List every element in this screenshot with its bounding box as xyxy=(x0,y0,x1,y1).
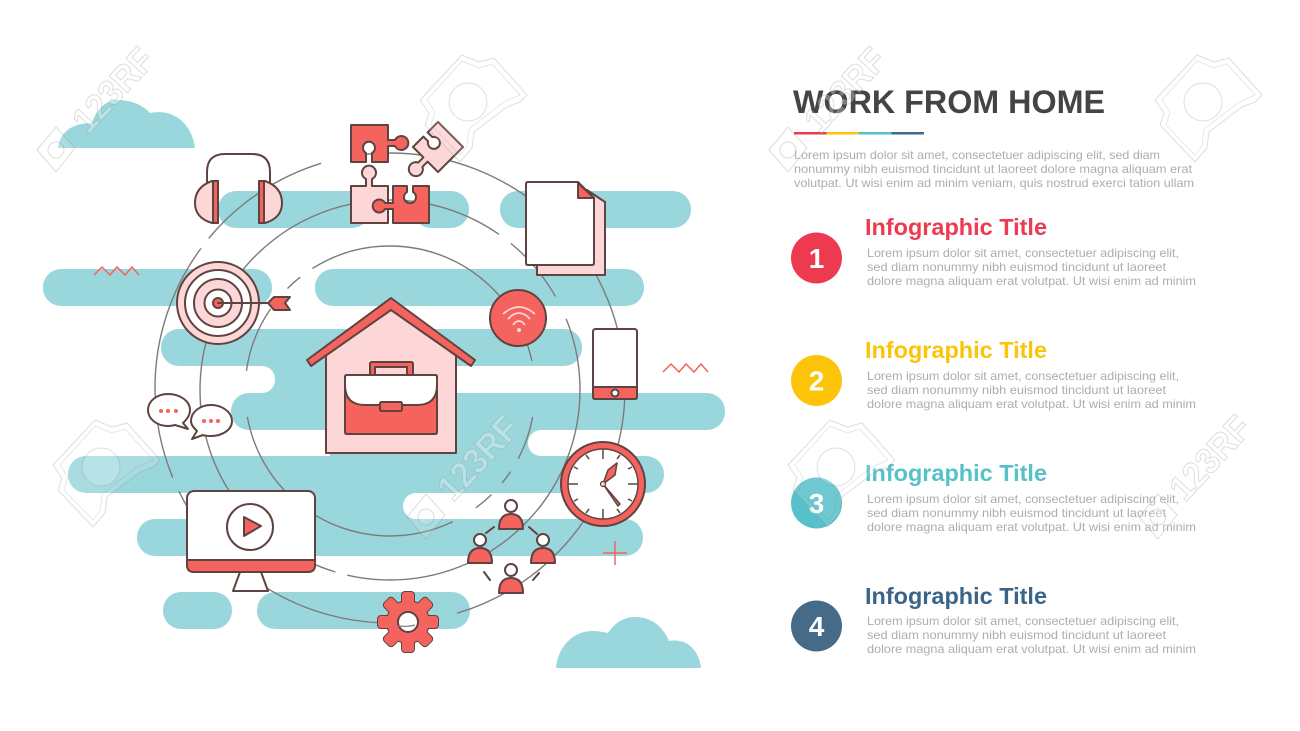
item 1: Lorem ipsum dolor sit amet, consectetuer adipiscing elit, xyxy=(867,246,1179,260)
item 3: sed diam nonummy nibh euismod tincidunt ut laoreet xyxy=(867,506,1167,520)
item 1: dolore magna aliquam erat volutpat. Ut wisi enim ad minim xyxy=(867,274,1196,288)
icon: headphones xyxy=(195,154,282,223)
concentric rings xyxy=(155,153,625,623)
watermarks xyxy=(37,39,1262,539)
item 2: Lorem ipsum dolor sit amet, consectetuer adipiscing elit, xyxy=(867,369,1179,383)
item 2 xyxy=(791,337,1196,411)
item 4: dolore magna aliquam erat volutpat. Ut wisi enim ad minim xyxy=(867,642,1196,656)
item 3: Lorem ipsum dolor sit amet, consectetuer adipiscing elit, xyxy=(867,492,1179,506)
item 2: Infographic Title xyxy=(865,337,1047,363)
title: WORK FROM HOME xyxy=(793,84,1105,120)
item 1 xyxy=(791,214,1196,288)
icon: target with arrow xyxy=(177,262,290,344)
icon: wifi xyxy=(490,290,546,346)
icon: documents xyxy=(526,182,605,275)
item 1: sed diam nonummy nibh euismod tincidunt ut laoreet xyxy=(867,260,1167,274)
icon: monitor with play button xyxy=(187,491,315,591)
item 3: Infographic Title xyxy=(865,460,1047,486)
icon: tablet xyxy=(593,329,637,399)
item 4: 4 xyxy=(809,611,825,642)
intro text xyxy=(794,148,1194,190)
item 3: dolore magna aliquam erat volutpat. Ut wisi enim ad minim xyxy=(867,520,1196,534)
icon: puzzle pieces xyxy=(351,122,463,223)
item 4: sed diam nonummy nibh euismod tincidunt ut laoreet xyxy=(867,628,1167,642)
item 2: 2 xyxy=(809,366,824,396)
item 2: sed diam nonummy nibh euismod tincidunt ut laoreet xyxy=(867,383,1167,397)
briefcase xyxy=(345,362,437,434)
item 4 xyxy=(791,583,1196,656)
item 1: Infographic Title xyxy=(865,214,1047,240)
accent plus xyxy=(603,541,627,565)
icon: clock xyxy=(561,442,645,526)
intro text: nonummy nibh euismod tincidunt ut laoreet dolore magna aliquam erat xyxy=(794,162,1193,176)
teal background bands xyxy=(43,191,725,629)
title colour bar xyxy=(794,132,924,134)
accent zigzag left xyxy=(94,267,139,275)
item 3: 3 xyxy=(809,488,824,519)
item 4: Infographic Title xyxy=(865,583,1047,609)
item 4: Lorem ipsum dolor sit amet, consectetuer adipiscing elit, xyxy=(867,614,1179,628)
item 3 xyxy=(791,460,1196,534)
icon: chat bubbles xyxy=(148,394,232,439)
panel: text column xyxy=(791,84,1196,656)
cloud top left xyxy=(58,100,195,148)
icon: gear xyxy=(378,592,438,652)
watermarks: 123RF xyxy=(429,407,527,508)
item 1: 1 xyxy=(809,243,824,274)
cloud bottom right xyxy=(556,617,701,668)
accent zigzag right xyxy=(663,364,708,372)
icon: house with briefcase xyxy=(307,298,475,453)
watermarks: 123RF xyxy=(796,39,894,140)
icon: team of people xyxy=(468,500,555,593)
panel: illustration xyxy=(43,100,725,668)
intro text: Lorem ipsum dolor sit amet, consectetuer adipiscing elit, sed diam xyxy=(794,148,1160,162)
intro text: volutpat. Ut wisi enim ad minim veniam, quis nostrud exerci tation ullam xyxy=(794,176,1194,190)
watermarks: 123RF xyxy=(64,39,162,140)
item 2: dolore magna aliquam erat volutpat. Ut wisi enim ad minim xyxy=(867,397,1196,411)
watermarks: 123RF xyxy=(1161,407,1259,508)
